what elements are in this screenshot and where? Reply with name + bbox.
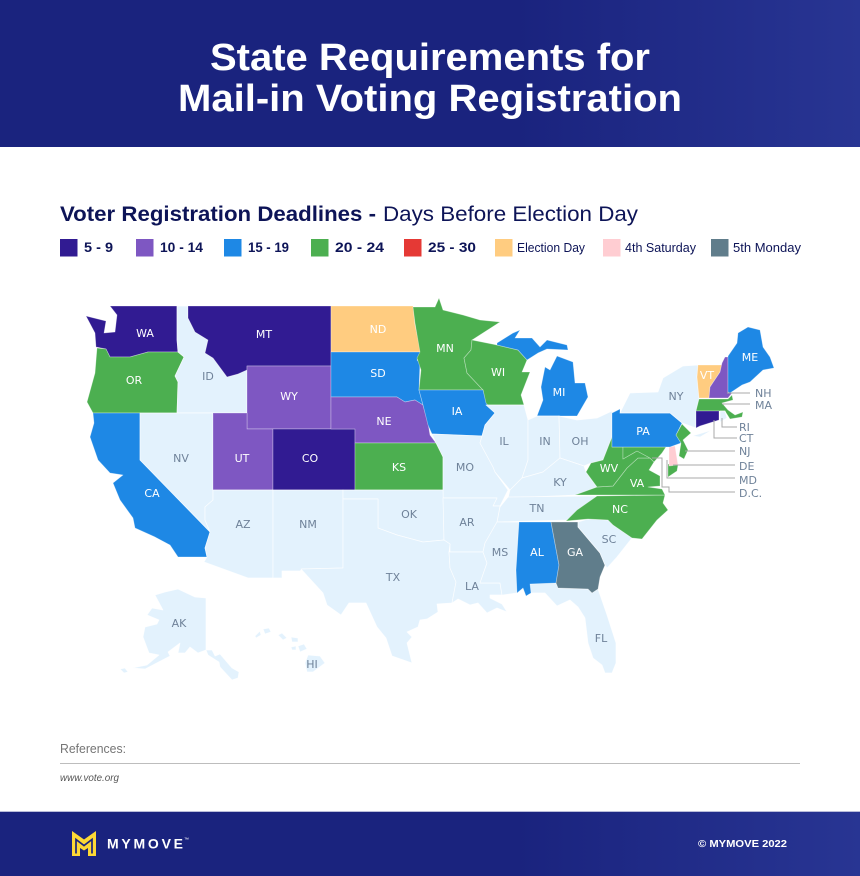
title	[178, 37, 682, 120]
state: North Carolina	[566, 495, 668, 539]
state: Missouri	[432, 434, 508, 506]
copyright: © MYMOVE 2022	[698, 838, 787, 850]
small state labels	[739, 387, 772, 500]
state: Arizona: AZ	[235, 518, 251, 531]
legend: 5th Monday	[733, 241, 802, 255]
state: Kansas: KS	[392, 461, 406, 474]
state: Louisiana	[449, 552, 507, 613]
state: Illinois: IL	[499, 435, 510, 448]
legend: 5 - 9	[84, 239, 113, 255]
state: North Carolina: NC	[612, 503, 628, 516]
state: Florida: FL	[595, 632, 608, 645]
state: Hawaii: HI	[306, 658, 318, 671]
logo wordmark: ™	[184, 837, 189, 843]
state: Minnesota	[413, 298, 500, 390]
state: North Dakota	[331, 306, 421, 352]
state: Tennessee	[497, 496, 597, 522]
state: Arkansas	[443, 498, 500, 552]
state: Michigan	[497, 330, 588, 416]
state: Pennsylvania: PA	[636, 425, 650, 438]
subtitle heading: Voter Registration Deadlines -	[60, 203, 376, 226]
state: Maryland	[623, 447, 678, 477]
state: Maine	[728, 327, 774, 393]
state: Missouri: MO	[456, 461, 474, 474]
small state labels: NJ	[739, 445, 750, 458]
state: Arizona	[204, 490, 273, 578]
state: Iowa: IA	[452, 405, 463, 418]
state: Indiana	[522, 416, 560, 478]
source link: www.vote.org	[60, 773, 119, 784]
state: Hawaii	[255, 628, 325, 672]
state: Georgia: GA	[567, 546, 583, 559]
logo wordmark: MYMOVE	[107, 836, 183, 852]
subtitle heading	[60, 203, 639, 226]
legend: 15 - 19	[248, 239, 289, 255]
state: Colorado	[273, 429, 355, 490]
state: Alabama	[516, 522, 559, 596]
leader lines	[652, 393, 750, 492]
state: Georgia	[551, 522, 605, 593]
state: New Hampshire	[709, 357, 732, 398]
state: Nevada: NV	[173, 452, 189, 465]
state: South Carolina	[578, 519, 632, 568]
state: Wyoming	[247, 366, 331, 429]
state: Utah	[213, 413, 273, 490]
legend	[60, 239, 802, 256]
legend: 20 - 24	[335, 239, 384, 255]
logo icon	[72, 831, 96, 856]
state: Kansas	[355, 443, 443, 490]
legend: 10 - 14	[160, 239, 203, 255]
state: Wisconsin: WI	[491, 366, 505, 379]
footer banner	[0, 811, 860, 876]
small state labels: MA	[755, 399, 772, 412]
state: West Virginia	[586, 437, 650, 487]
state: North Dakota: ND	[370, 323, 386, 336]
small state labels: MD	[739, 474, 757, 487]
state: Michigan: MI	[553, 386, 565, 399]
subtitle heading: Days Before Election Day	[383, 203, 639, 226]
small state labels: CT	[739, 432, 754, 445]
state: Pennsylvania	[612, 409, 682, 447]
state: West Virginia: WV	[600, 462, 619, 475]
title: Mail-in Voting Registration	[178, 78, 682, 120]
state: Kentucky: KY	[553, 476, 567, 489]
state: New York	[620, 365, 712, 437]
map of US states	[86, 298, 774, 680]
state: Wyoming: WY	[280, 390, 298, 403]
legend: 4th Saturday	[625, 241, 697, 255]
state: Ohio: OH	[572, 435, 588, 448]
state: Nevada	[140, 413, 213, 532]
state: South Dakota: SD	[370, 367, 386, 380]
state: New Mexico: NM	[299, 518, 317, 531]
state: California	[90, 413, 210, 557]
state: Texas: TX	[385, 571, 401, 584]
references	[60, 741, 800, 784]
state: Oklahoma: OK	[401, 508, 418, 521]
state: Iowa	[419, 390, 495, 436]
state: Minnesota: MN	[436, 342, 454, 355]
state: Alaska	[120, 589, 239, 680]
state: Colorado: CO	[302, 452, 319, 465]
state: Virginia: VA	[630, 477, 645, 490]
state: Maine: ME	[742, 351, 758, 364]
state: Ohio	[559, 411, 612, 466]
state: Mississippi: MS	[492, 546, 508, 559]
state: Vermont: VT	[700, 369, 714, 382]
state: Indiana: IN	[539, 435, 551, 448]
state: Oklahoma	[343, 490, 444, 542]
state: Florida	[529, 583, 616, 673]
state: Virginia	[575, 458, 665, 495]
state: New York: NY	[669, 390, 684, 403]
state: Arkansas: AR	[459, 516, 475, 529]
small state labels: DE	[739, 460, 754, 473]
state: Louisiana: LA	[465, 580, 479, 593]
title: State Requirements for	[210, 37, 650, 79]
small state labels: NH	[755, 387, 772, 400]
state: Wisconsin	[464, 340, 530, 405]
state: Vermont	[697, 365, 722, 398]
state: Kentucky	[508, 458, 597, 498]
state: Alabama: AL	[530, 546, 545, 559]
state: Oregon	[87, 348, 184, 413]
state: Nebraska: NE	[376, 415, 392, 428]
state: Montana	[188, 306, 331, 377]
state: California: CA	[144, 487, 160, 500]
header banner	[0, 0, 860, 147]
state: South Carolina: SC	[602, 533, 617, 546]
state: Montana: MT	[256, 328, 272, 341]
state: Delaware	[669, 446, 678, 466]
small state labels: D.C.	[739, 487, 762, 500]
state: Washington: WA	[136, 327, 154, 340]
legend: 25 - 30	[428, 239, 476, 255]
state: Mississippi	[480, 522, 519, 595]
state: Nebraska	[331, 397, 436, 443]
state: Tennessee: TN	[529, 502, 544, 515]
state: Alaska: AK	[172, 617, 187, 630]
state: Illinois	[480, 405, 528, 490]
state: New Mexico	[273, 490, 343, 578]
legend: Election Day	[517, 241, 586, 255]
state: Idaho: ID	[202, 370, 214, 383]
state: Connecticut	[696, 411, 719, 428]
state: Utah: UT	[235, 452, 250, 465]
state: New Jersey	[676, 424, 691, 459]
state: Massachusetts	[696, 395, 743, 419]
small state labels: RI	[739, 421, 750, 434]
state: Washington	[86, 306, 178, 357]
state: South Dakota	[331, 352, 423, 405]
state: Rhode Island	[720, 411, 727, 422]
state: Texas	[301, 499, 456, 663]
state: Oregon: OR	[126, 374, 143, 387]
state: Idaho	[175, 306, 247, 413]
references: References:	[60, 741, 126, 756]
